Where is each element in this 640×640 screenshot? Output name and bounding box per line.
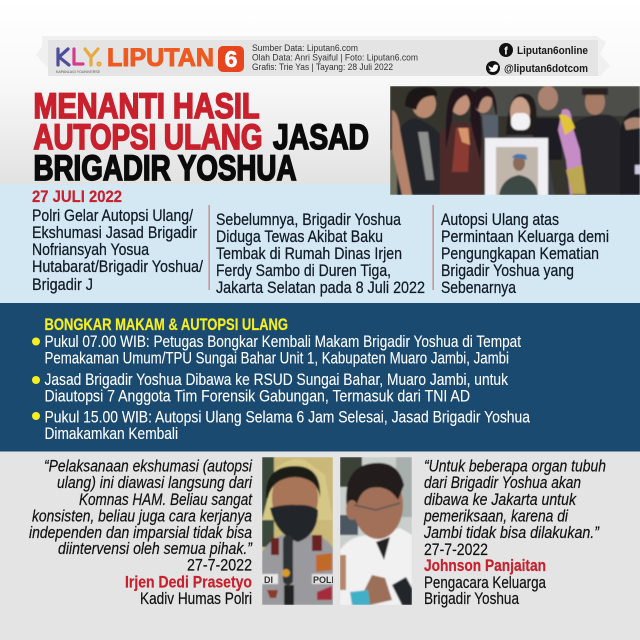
quote: Johnson Panjaitan [423, 458, 606, 608]
title: BRIGADIR YOSHUA [34, 149, 296, 188]
bullet 1 [32, 332, 521, 368]
icon: twitter [486, 61, 500, 75]
text column 3: Permintaan Keluarga demi [441, 227, 609, 246]
bullet 2 [32, 370, 508, 406]
photo: family with framed portrait [390, 86, 640, 195]
woman right rear [475, 95, 494, 114]
bullet 2: Diautopsi 7 Anggota Tim Forensik Gabungan, Termasuk dari TNI AD [44, 386, 470, 406]
frame [485, 138, 548, 195]
text column 1 [32, 206, 203, 294]
social: twitter handle: @liputan6dotcom [504, 63, 588, 75]
panel: summary band [0, 184, 640, 303]
source credits: Olah Data: Anri Syaiful | Foto: Liputan6.com [252, 52, 418, 62]
quote: Johnson Panjaitan: “Untuk beberapa organ tubuh [424, 458, 606, 476]
text column 1: Polri Gelar Autopsi Ulang/ [32, 206, 193, 225]
logo: 6 badge [218, 46, 244, 72]
text column 1: Hutabarat/Brigadir Yoshua/ [32, 257, 203, 276]
bullet 1: Pemakaman Umum/TPU Sungai Bahar Unit 1, Kabupaten Muaro Jambi, Jambi [44, 348, 509, 368]
quote: Johnson Panjaitan: 27-7-2022 [424, 541, 488, 559]
quote: Johnson Panjaitan: Brigadir Yoshua [424, 590, 520, 608]
text column 2: Diduga Tewas Akibat Baku [216, 227, 383, 246]
quote: Dedi Prasetyo: independen dan imparsial tidak bisa [29, 524, 252, 542]
text column 3: Sebenarnya [441, 278, 516, 297]
text column 3: Brigadir Yoshua yang [441, 261, 574, 280]
logo: 6 badge: 6 [225, 46, 237, 72]
man right [585, 89, 605, 115]
source credits [252, 43, 418, 72]
timeline heading: BONGKAR MAKAM & AUTOPSI ULANG [44, 316, 288, 334]
uniform badge text: DI [264, 575, 273, 585]
text column 2 [216, 210, 425, 297]
text column 2: Jakarta Selatan pada 8 Juli 2022 [216, 278, 425, 297]
logo: KLY [56, 49, 101, 74]
source credits: Sumber Data: Liputan6.com [252, 43, 358, 53]
bullet 1: Pukul 07.00 WIB: Petugas Bongkar Kembali Makam Brigadir Yoshua di Tempat [44, 332, 521, 351]
quote: Dedi Prasetyo: 27-7-2022 [187, 557, 252, 575]
icon: facebook: f [504, 46, 508, 58]
quote: Dedi Prasetyo: “Pelaksanaan ekshumasi (autopsi [44, 458, 253, 476]
text column 3: Pengungkapan Kematian [441, 244, 599, 263]
quote: Dedi Prasetyo: Kadiv Humas Polri [140, 590, 252, 608]
uniform badge text: POLI [313, 575, 334, 585]
quote: Johnson Panjaitan: Jambi tidak bisa dilakukan.” [423, 524, 600, 542]
photo: Dedi Prasetyo [262, 457, 334, 605]
woman centre with mask [507, 135, 555, 195]
title: JASAD [273, 118, 369, 157]
title: AUTOPSI ULANG [34, 118, 262, 157]
source credits: Grafis: Trie Yas | Tayang: 28 Juli 2022 [252, 62, 393, 72]
quote: Dedi Prasetyo: konsisten, beliau juga cara kerjanya [32, 508, 252, 526]
quote: Dedi Prasetyo: diintervensi oleh semua pihak.” [58, 540, 253, 558]
text column 2: Sebelumnya, Brigadir Yoshua [216, 210, 401, 229]
text column 2: Ferdy Sambo di Duren Tiga, [216, 261, 391, 280]
title [34, 87, 369, 188]
text column 1: Nofriansyah Yosua [32, 240, 149, 259]
text column 1: Ekshumasi Jasad Brigadir [32, 223, 197, 242]
quote: Dedi Prasetyo [29, 458, 253, 608]
text column 3 [441, 210, 609, 297]
panel: exhumation timeline [0, 303, 640, 452]
quote: Johnson Panjaitan: dari Brigadir Yoshua akan [424, 474, 581, 492]
date heading: 27 JULI 2022 [32, 187, 122, 206]
quote: Johnson Panjaitan: Pengacara Keluarga [424, 574, 547, 592]
bullet 2: Jasad Brigadir Yoshua Dibawa ke RSUD Sungai Bahar, Muaro Jambi, untuk [44, 370, 508, 389]
bullet 3: Dimakamkan Kembali [44, 424, 178, 443]
header ribbon [36, 36, 610, 76]
text column 1: Brigadir J [32, 275, 93, 294]
woman middle [440, 122, 482, 195]
logo: KLY: KAPANLAGI YOUNIVERSE [56, 70, 101, 74]
social: facebook handle: Liputan6online [517, 45, 588, 57]
text column 3: Autopsi Ulang atas [441, 210, 559, 229]
logo: Liputan6 wordmark: LIPUTAN [107, 44, 214, 72]
text column 2: Tembak di Rumah Dinas Irjen [216, 244, 402, 263]
bullet 3 [32, 408, 530, 443]
photo: Johnson Panjaitan [340, 457, 412, 605]
quote: Dedi Prasetyo: ulang) ini diawasi langsung dari [57, 474, 253, 492]
person far right [620, 108, 640, 195]
quote: Dedi Prasetyo: Komnas HAM. Beliau sangat [79, 491, 253, 509]
flower garland [558, 109, 584, 195]
icon: facebook [499, 43, 513, 58]
quote: Johnson Panjaitan: dibawa ke Jakarta untuk [424, 491, 577, 509]
uniform badge text [264, 576, 333, 583]
man behind [538, 86, 558, 110]
quote: Johnson Panjaitan: Johnson Panjaitan [424, 557, 546, 575]
quote: Dedi Prasetyo: Irjen Dedi Prasetyo [125, 574, 252, 592]
woman left [396, 118, 440, 195]
title: MENANTI HASIL [34, 87, 260, 126]
bullet 3: Pukul 15.00 WIB: Autopsi Ulang Selama 6 Jam Selesai, Jasad Brigadir Yoshua [44, 408, 530, 426]
quote: Johnson Panjaitan: pemeriksaan, karena di [423, 508, 569, 526]
